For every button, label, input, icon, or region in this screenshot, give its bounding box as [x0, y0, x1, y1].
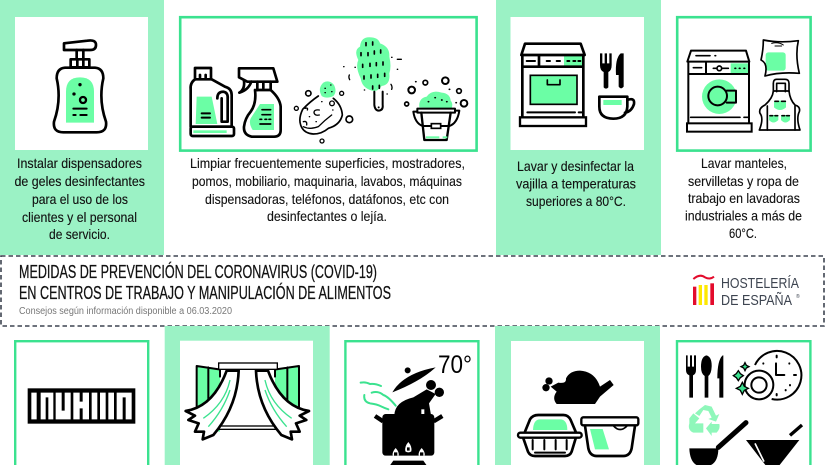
text: laundry — [685, 155, 802, 241]
icon: chicken and food containers — [518, 371, 638, 456]
text: laundry: industriales a más de — [685, 208, 802, 224]
text: dispensers: para el uso de los — [32, 191, 128, 207]
text: surfaces — [190, 155, 465, 224]
icon: washing machine — [687, 51, 752, 132]
text: surfaces: dispensadoras, teléfonos, datáfonos, etc con — [205, 191, 449, 207]
panel: dispensers — [0, 0, 164, 255]
logo: Hostelería de España: HOSTELERÍA — [721, 275, 799, 292]
text: laundry: servilletas y ropa de — [688, 173, 799, 189]
icon: dishwasher and cutlery — [520, 44, 634, 126]
title: MEDIDAS DE PREVENCIÓN DEL CORONAVIRUS (COVID-19) — [19, 261, 377, 282]
panel: bottom 2 ventilate — [165, 326, 330, 465]
icon: recycling — [689, 405, 720, 436]
logo: Hostelería de España — [693, 275, 800, 309]
icon: apron — [759, 79, 800, 130]
panel: bottom 3 cooking — [345, 341, 478, 465]
icon: brush — [344, 37, 401, 111]
logo: Hostelería de España: DE ESPAÑA — [721, 292, 792, 309]
text: dispensers: de geles desinfectantes — [14, 173, 145, 189]
text: laundry: 60°C. — [729, 225, 757, 241]
text: dishes: superiores a 80°C. — [526, 193, 626, 209]
icon: sponge — [294, 81, 353, 143]
text: dishes — [516, 158, 636, 209]
text: dispensers — [14, 155, 145, 242]
text: dishes: vajilla a temperaturas — [516, 176, 636, 192]
panel: bottom 4 containers — [495, 326, 660, 465]
text: surfaces: Limpiar frecuentemente superficies, mostradores, — [190, 155, 465, 171]
logo: Hostelería de España: ® — [796, 293, 800, 300]
icon: napkin — [761, 40, 799, 76]
panel: surfaces — [180, 17, 477, 224]
text: laundry: trabajo en lavadoras — [688, 190, 800, 206]
panel: laundry — [677, 17, 811, 241]
title: EN CENTROS DE TRABAJO Y MANIPULACIÓN DE ALIMENTOS — [19, 282, 391, 303]
icon: soap dispenser — [54, 40, 106, 132]
icon: bucket — [405, 77, 467, 140]
text: dishes: Lavar y desinfectar la — [517, 158, 634, 174]
text: surfaces: desinfectantes o lejía. — [267, 208, 387, 224]
panel: header banner — [1, 256, 824, 326]
text: surfaces: pomos, mobiliario, maquinaria, lavabos, máquinas — [192, 173, 462, 189]
text: laundry: Lavar manteles, — [701, 155, 787, 171]
panel: bottom 5 kitchenware — [677, 341, 810, 465]
text: 70 degrees: 70° — [438, 351, 472, 379]
icon: ventilation grid — [28, 388, 135, 424]
icon: cutlery, clock, recycling and utensils — [686, 351, 802, 465]
icon: open window with curtains — [186, 363, 309, 439]
title — [19, 261, 391, 303]
icon: cleaning bottles — [191, 68, 281, 137]
text: dispensers: de servicio. — [49, 226, 110, 242]
subtitle: Consejos según información disponible a 06.03.2020 — [19, 306, 232, 317]
text: dispensers: clientes y el personal — [22, 209, 137, 225]
panel: dishes — [496, 0, 661, 255]
text: dispensers: Instalar dispensadores — [17, 155, 142, 171]
icon: pot with chicken — [361, 367, 444, 465]
panel: bottom 1 barcode — [15, 341, 148, 465]
